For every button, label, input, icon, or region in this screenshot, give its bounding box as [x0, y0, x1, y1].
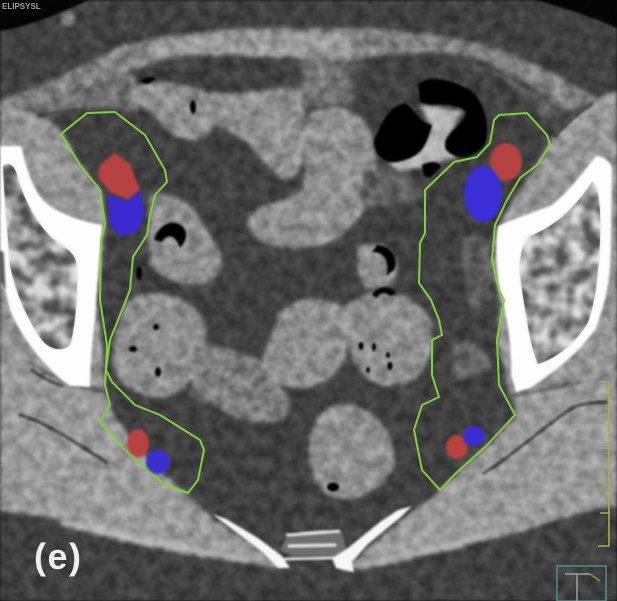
- scan header text: ELIPSYSL: [2, 2, 41, 11]
- iliac hip muscles: [0, 90, 617, 395]
- left lymph node region outline: [61, 112, 204, 493]
- left lower red node: [127, 429, 149, 457]
- right upper red node: [490, 143, 522, 181]
- bright colon wall: [388, 105, 462, 172]
- orientation marker: [557, 566, 606, 601]
- abdominal wall muscle band: [0, 28, 600, 122]
- right lower blue node: [463, 426, 485, 446]
- bowel gas pockets: [129, 77, 487, 492]
- upper wall patch: [300, 58, 352, 110]
- left upper blue node: [107, 190, 145, 236]
- right iliac bone: [496, 156, 612, 392]
- left iliac bone: [0, 146, 102, 387]
- scale ruler: [598, 382, 609, 546]
- bone marrow texture: [0, 160, 617, 370]
- right lymph node region outline: [414, 113, 550, 490]
- muscle separating fat planes: [20, 104, 606, 473]
- left lower blue node: [146, 450, 170, 474]
- bowel loops: [112, 82, 493, 498]
- subcutaneous nodule: [61, 11, 75, 27]
- gluteal muscles: [0, 335, 617, 572]
- panel label: (e): [34, 536, 82, 577]
- right upper blue node: [464, 166, 502, 222]
- left upper red node: [98, 153, 140, 200]
- sacrum bone: [212, 506, 412, 572]
- right lower red node: [446, 435, 468, 459]
